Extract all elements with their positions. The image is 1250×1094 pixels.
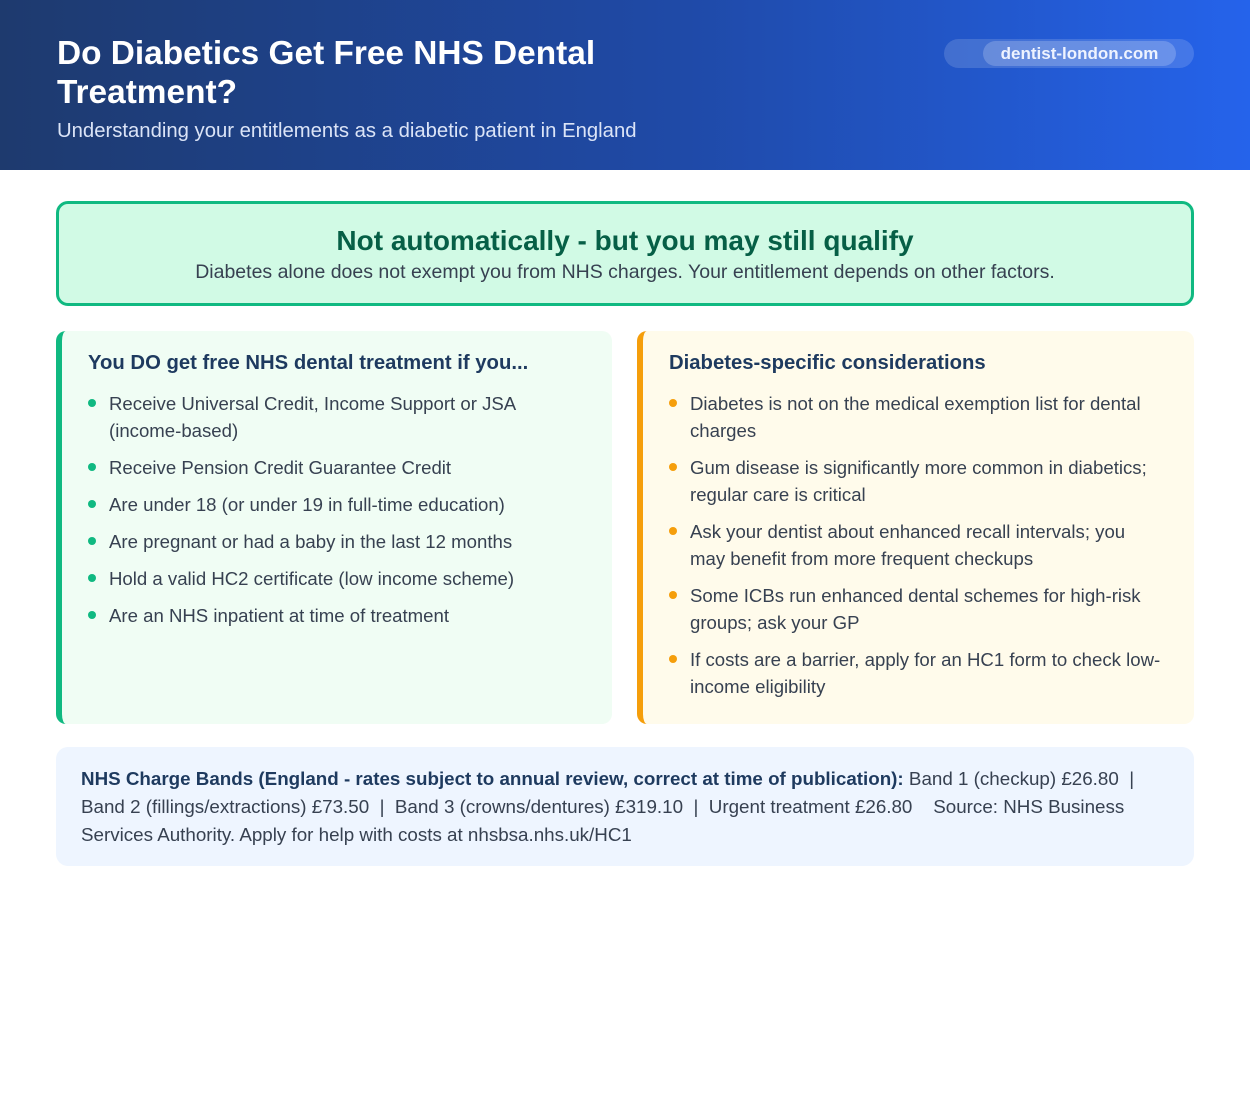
panel: free treatment eligibility: Are an NHS inpatient at time of treatment (109, 605, 449, 626)
badge: site (944, 39, 1194, 68)
panel: diabetes considerations (637, 331, 1194, 724)
badge: site: dentist-london.com (1001, 44, 1158, 63)
panel: free treatment eligibility: Are under 18 (or under 19 in full-time education) (109, 494, 505, 515)
callout: answer: Diabetes alone does not exempt you from NHS charges. Your entitlement depends on other factors. (195, 261, 1055, 283)
charge bands note: NHS Charge Bands (England - rates subject to annual review, correct at time of publication): Band 1 (checkup) £26.80 | Band 2 (fillings/extractions) £73.50 | Band 3 (crowns/dentures) £319.10 | Urgent treatment £26.80 Source: NHS Business Services Authority. Apply for help with costs at nhsbsa.nhs.uk/HC1 (81, 768, 1139, 845)
panel: diabetes considerations: Diabetes is not on the medical exemption list for dental charges (690, 393, 1141, 441)
panel: free treatment eligibility: Hold a valid HC2 certificate (low income scheme) (109, 568, 514, 589)
panel: free treatment eligibility: Are pregnant or had a baby in the last 12 months (109, 531, 512, 552)
header (0, 0, 1250, 170)
panel: diabetes considerations: may benefit from more frequent checkups (690, 548, 1033, 569)
callout: answer (56, 201, 1194, 306)
panel: diabetes considerations: Some ICBs run enhanced dental schemes for high-risk groups; ask your GP (690, 585, 1141, 633)
subtitle: Understanding your entitlements as a diabetic patient in England (57, 120, 637, 142)
panel: free treatment eligibility: Receive Universal Credit, Income Support or JSA (income-based) (109, 393, 515, 441)
panel: free treatment eligibility (56, 331, 612, 724)
panel: free treatment eligibility: Receive Pension Credit Guarantee Credit (109, 457, 451, 478)
panel: free treatment eligibility: You DO get free NHS dental treatment if you... (88, 352, 528, 374)
panel: diabetes considerations: income eligibility (690, 676, 825, 697)
panel: diabetes considerations: If costs are a barrier, apply for an HC1 form to check low- (690, 649, 1160, 670)
panel: diabetes considerations: Gum disease is significantly more common in diabetics; regular care is critical (690, 457, 1147, 505)
title: Do Diabetics Get Free NHS Dental Treatment? (57, 35, 595, 111)
panel: diabetes considerations: Diabetes-specific considerations (669, 352, 986, 374)
callout: answer: Not automatically - but you may still qualify (336, 225, 914, 256)
charge bands note (56, 747, 1194, 866)
panel: diabetes considerations: Ask your dentist about enhanced recall intervals; you (690, 521, 1125, 542)
